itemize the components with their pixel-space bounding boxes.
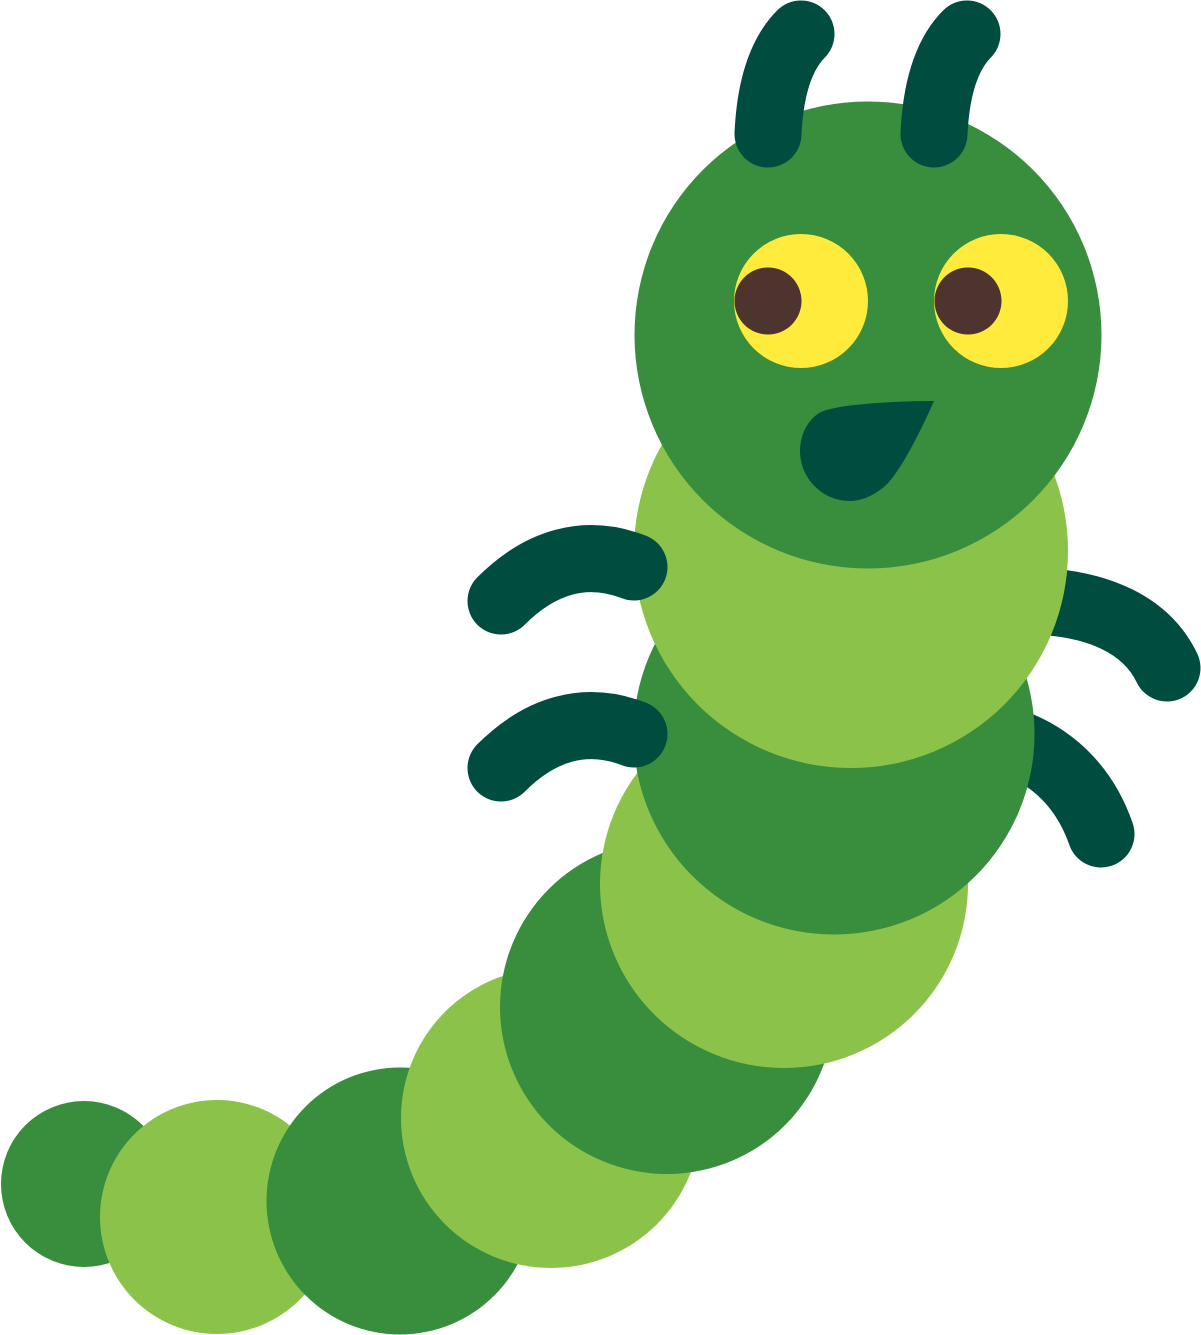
mouth [800, 401, 934, 501]
body segments [1, 334, 1068, 1334]
right legs [1020, 602, 1167, 834]
right eye [934, 234, 1068, 368]
antennae [768, 34, 967, 134]
left eye [734, 234, 868, 368]
left legs [501, 559, 634, 768]
head [634, 102, 1102, 568]
